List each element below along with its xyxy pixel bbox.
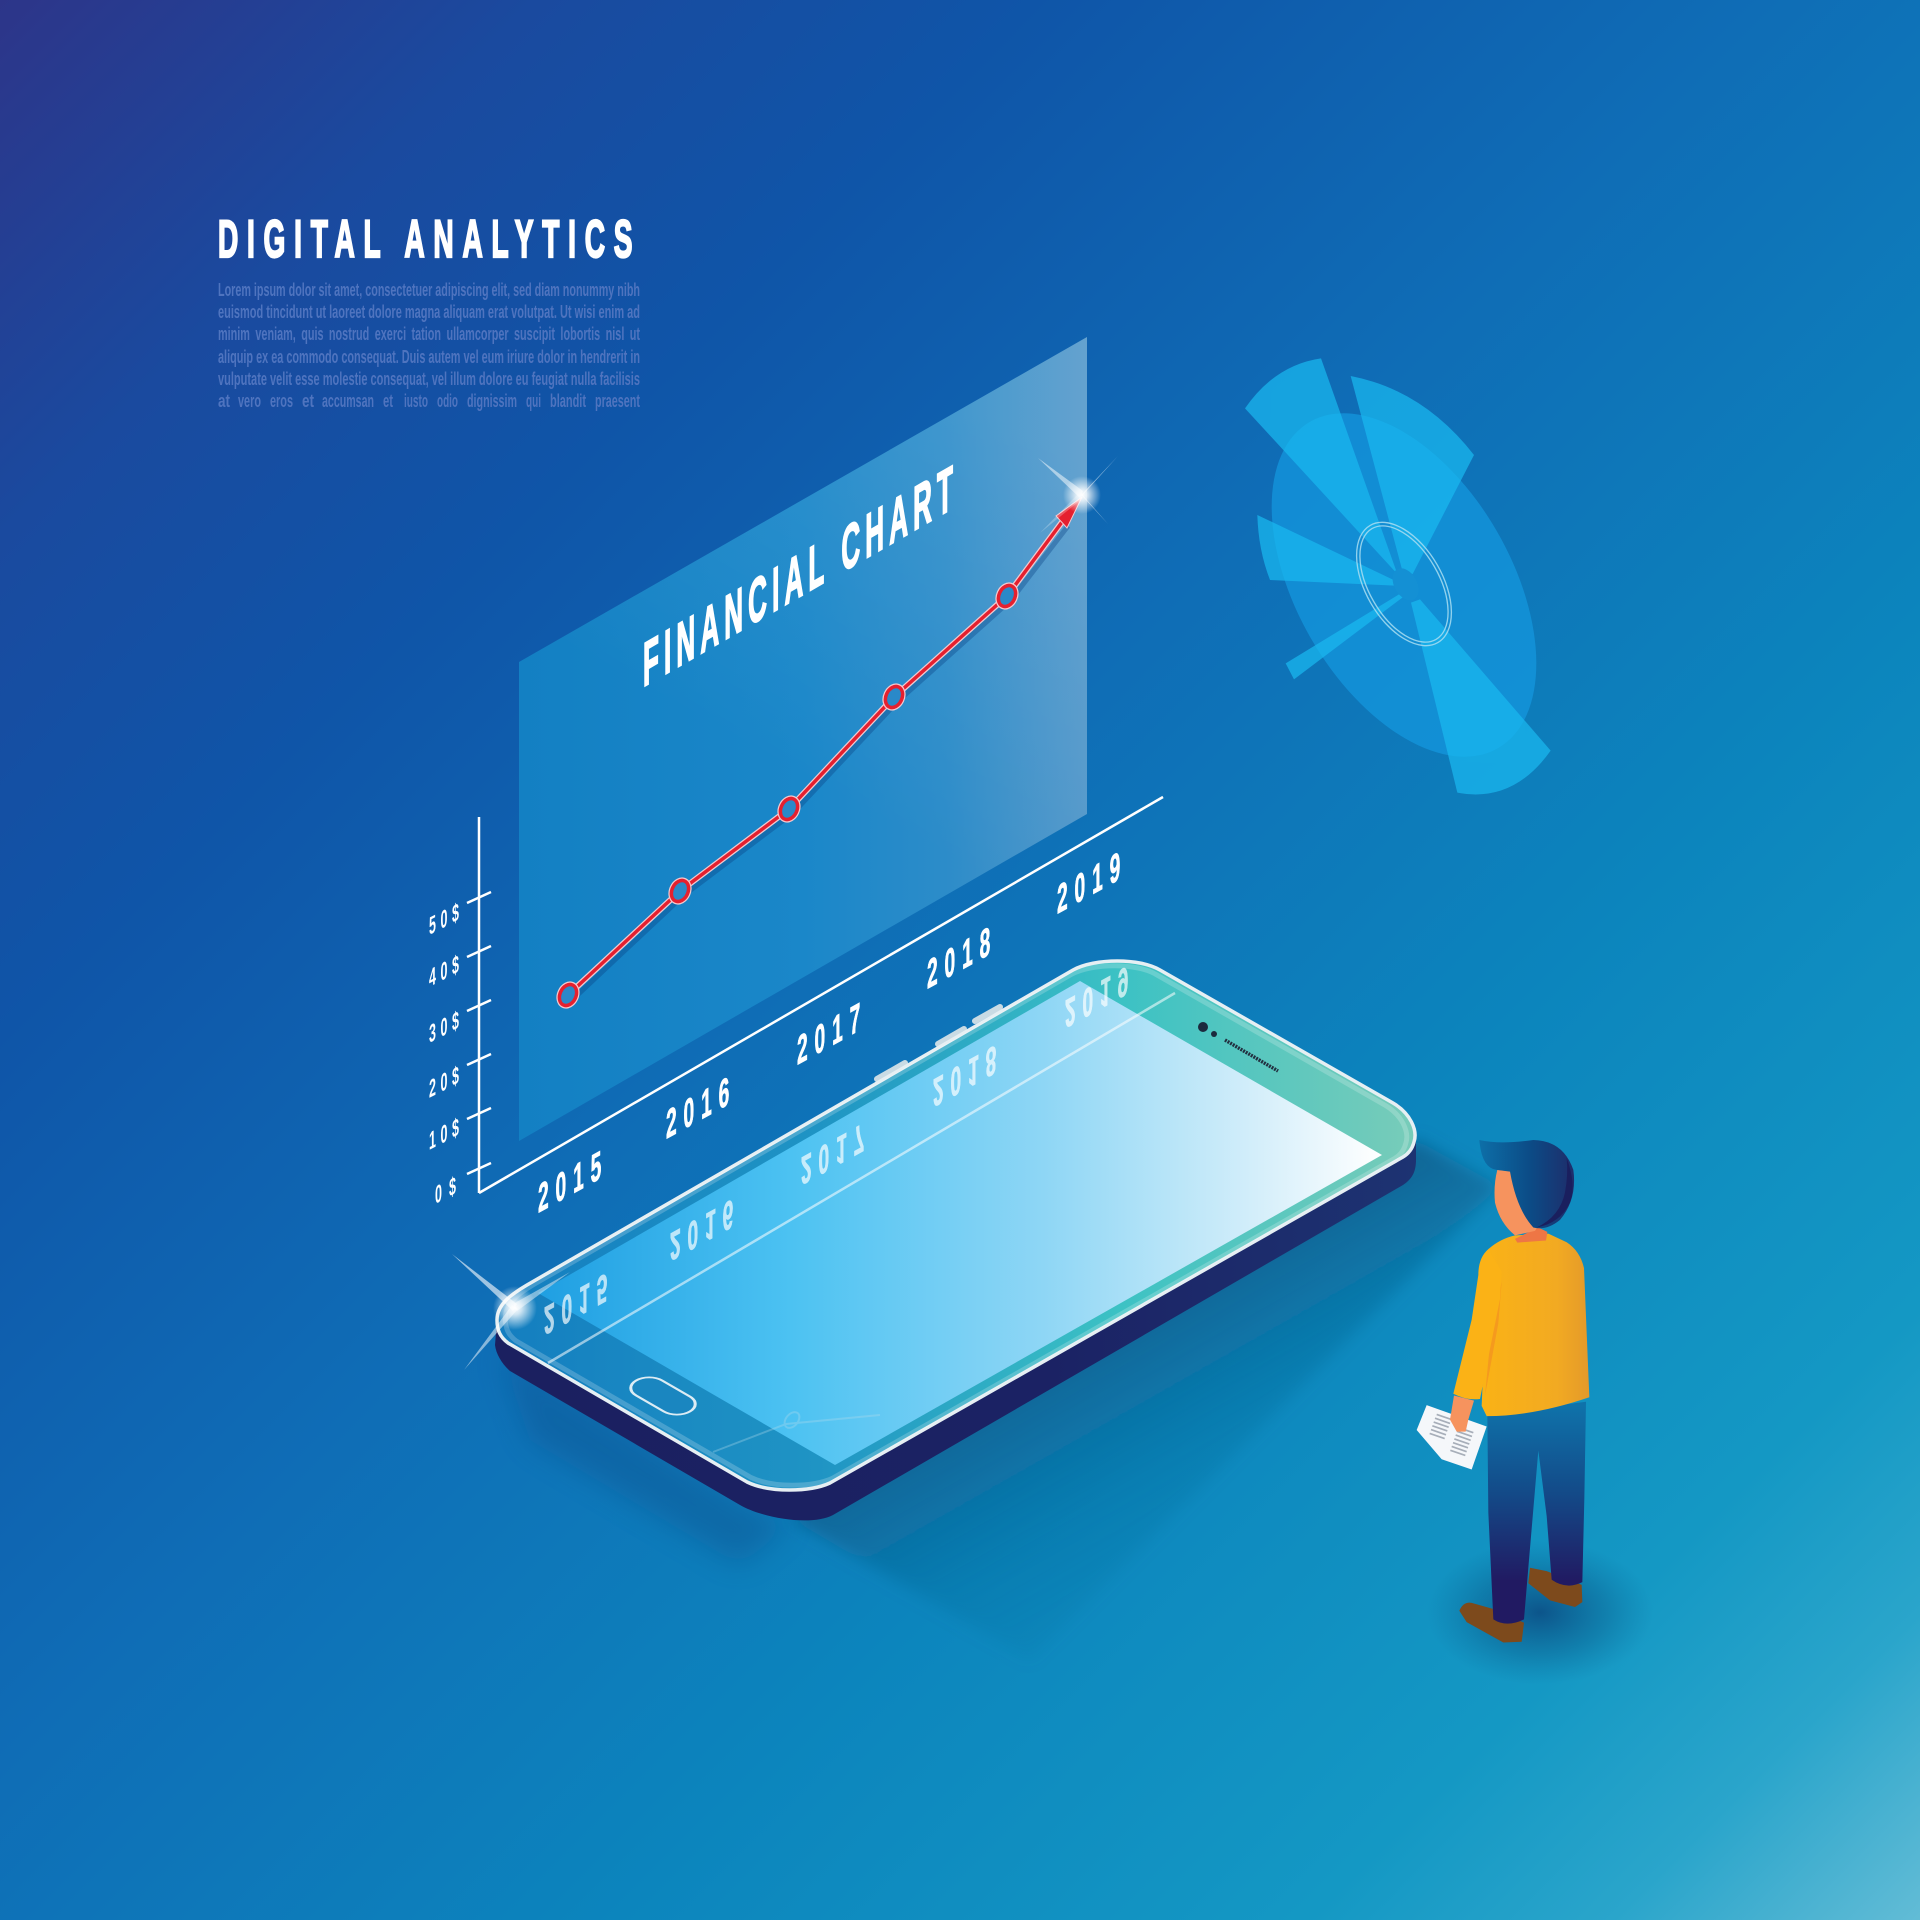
mirrored year labels on glass	[544, 957, 1128, 1344]
person	[1417, 1140, 1653, 1685]
sweater	[1453, 1234, 1589, 1416]
text block: lorem ipsum paragraph	[218, 280, 640, 411]
text block: lorem ipsum paragraph: qui	[526, 391, 541, 411]
text block: lorem ipsum paragraph: et	[383, 391, 393, 411]
phone body depth	[495, 1135, 1416, 1520]
mirrored year labels on glass: 2019	[1065, 957, 1128, 1037]
text block: lorem ipsum paragraph: iusto	[404, 391, 428, 411]
phone glass inner rim	[505, 966, 1407, 1485]
text block: lorem ipsum paragraph: vulputate velit esse molestie consequat, vel illum dolore eu feugiat nulla facilisis	[218, 369, 640, 389]
x axis with year labels: 2016	[666, 1068, 729, 1148]
text block: lorem ipsum paragraph: vero	[238, 391, 261, 411]
x axis with year labels	[479, 797, 1163, 1222]
x axis with year labels: 2015	[538, 1142, 601, 1222]
x axis with year labels: 2017	[797, 994, 860, 1074]
y axis with ticks and labels: 50$	[429, 899, 459, 941]
x axis with year labels: 2018	[927, 918, 990, 998]
hair	[1479, 1140, 1574, 1228]
phone face	[497, 961, 1415, 1490]
person ground shadow	[1427, 1540, 1653, 1685]
icon: sparkle on phone corner	[452, 1254, 570, 1370]
y axis with ticks and labels: 20$	[429, 1062, 459, 1104]
speaker	[1225, 1040, 1278, 1071]
phone	[495, 957, 1416, 1520]
mirrored axis on glass	[548, 993, 1175, 1363]
icon: sparkle on arrow tip	[1038, 456, 1118, 533]
face	[1495, 1170, 1540, 1235]
paper	[1417, 1405, 1487, 1470]
y axis with ticks and labels: 30$	[429, 1007, 459, 1049]
text block: lorem ipsum paragraph: euismod tincidunt ut laoreet dolore magna aliquam erat volutpat. Ut wisi enim ad	[218, 302, 640, 322]
hair rim	[1537, 1158, 1573, 1227]
phone screen	[538, 981, 1382, 1465]
home button	[623, 1373, 703, 1419]
shoe front	[1459, 1603, 1524, 1642]
trousers	[1487, 1402, 1586, 1624]
hand	[1450, 1396, 1474, 1432]
text block: lorem ipsum paragraph: et	[302, 391, 314, 411]
chart: radial wedge dial	[1217, 358, 1591, 802]
y axis with ticks and labels: 10$	[429, 1114, 459, 1156]
text block: lorem ipsum paragraph: at	[218, 391, 230, 411]
heading: financial chart: FINANCIAL CHART	[643, 453, 953, 701]
line chart: red growth line	[556, 497, 1082, 1008]
y axis with ticks and labels	[429, 817, 491, 1210]
camera	[1198, 1022, 1217, 1037]
panel: financial chart glass	[519, 337, 1087, 1141]
mirrored year labels on glass: 2016	[670, 1190, 733, 1270]
text block: lorem ipsum paragraph: minim veniam, quis nostrud exerci tation ullamcorper suscipit lobortis nisl ut	[218, 324, 640, 344]
text block: lorem ipsum paragraph: praesent	[595, 391, 640, 411]
mirrored year labels on glass: 2017	[801, 1114, 864, 1194]
text block: lorem ipsum paragraph: dignissim	[467, 391, 517, 411]
shoe back	[1528, 1568, 1582, 1607]
text block: lorem ipsum paragraph: odio	[437, 391, 458, 411]
text block: lorem ipsum paragraph: Lorem ipsum dolor sit amet, consectetuer adipiscing elit, sed diam nonummy nibh	[218, 280, 640, 300]
x axis with year labels: 2019	[1057, 843, 1120, 923]
text block: lorem ipsum paragraph: blandit	[550, 391, 586, 411]
y axis with ticks and labels: 40$	[429, 951, 459, 993]
mirrored line faint	[713, 1409, 880, 1452]
title: DIGITAL ANALYTICS	[218, 210, 632, 268]
phone shadows	[500, 1140, 1500, 1660]
text block: lorem ipsum paragraph: eros	[270, 391, 293, 411]
neck	[1515, 1227, 1547, 1243]
y axis with ticks and labels: 0$	[435, 1172, 456, 1210]
text block: lorem ipsum paragraph: aliquip ex ea commodo consequat. Duis autem vel eum iriure dolor in hendrerit in	[218, 347, 640, 367]
mirrored year labels on glass: 2018	[933, 1036, 996, 1116]
text block: lorem ipsum paragraph: accumsan	[322, 391, 374, 411]
mirrored year labels on glass: 2015	[544, 1264, 607, 1344]
phone side buttons	[877, 1007, 1000, 1079]
